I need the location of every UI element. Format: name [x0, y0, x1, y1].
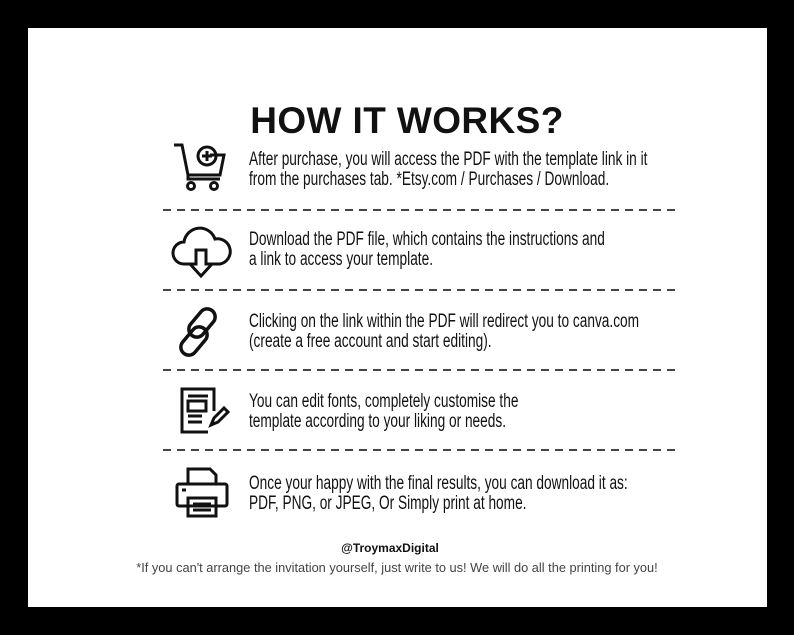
text: step 1: After purchase, you will access the PDF with the template link in it: [249, 149, 647, 170]
text: step 3: (create a free account and start editing).: [249, 331, 492, 352]
text: step 4: [249, 391, 518, 432]
text: step 1: [249, 149, 648, 190]
footer: handle: @TroymaxDigital: [341, 541, 439, 555]
text: step 4: You can edit fonts, completely customise the: [249, 391, 518, 412]
text: step 5: PDF, PNG, or JPEG, Or Simply print at home.: [249, 493, 526, 514]
footer: note: *If you can't arrange the invitation yourself, just write to us! We will do all the printing for you!: [136, 560, 658, 575]
text: step 4: template according to your liking or needs.: [249, 411, 506, 432]
icon: cart: [174, 144, 226, 191]
text: step 1: from the purchases tab. *Etsy.com / Purchases / Download.: [249, 169, 609, 190]
text: step 5: Once your happy with the final results, you can download it as:: [249, 473, 628, 494]
text: step 2: Download the PDF file, which contains the instructions and: [249, 229, 605, 250]
title: HOW IT WORKS?: [250, 100, 564, 141]
icon: printer: [176, 468, 228, 518]
text: step 3: [249, 311, 639, 352]
text: step 2: [249, 229, 605, 270]
icon: link: [179, 307, 217, 357]
icon: document with pen: [180, 388, 230, 434]
icon: cloud download: [172, 226, 232, 278]
text: step 3: Clicking on the link within the PDF will redirect you to canva.com: [249, 311, 639, 332]
text: step 2: a link to access your template.: [249, 249, 433, 270]
text: step 5: [249, 473, 628, 514]
